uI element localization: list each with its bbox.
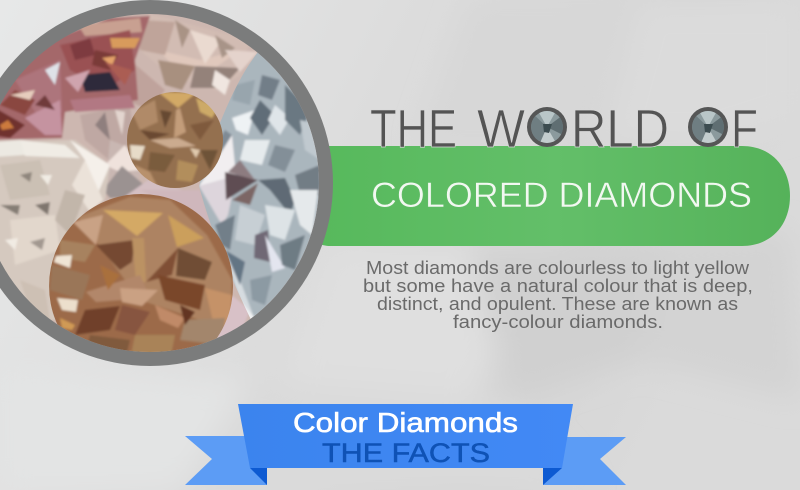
ribbon right fold [543, 468, 562, 485]
intro paragraph: Most diamonds are colourless to light yellow [366, 258, 750, 278]
facets: deep pink diamond [0, 16, 150, 140]
big brown diamond [49, 194, 233, 352]
facets: pale white diamond [0, 140, 110, 320]
title: THE WORLD OF: W [477, 99, 525, 159]
diamond photo [0, 14, 319, 352]
title: THE WORLD OF: THE [370, 99, 457, 159]
photo circle: colored diamonds [0, 0, 340, 382]
ribbon left fold [250, 468, 267, 485]
title: THE WORLD OF [370, 99, 758, 159]
intro paragraph: but some have a natural colour that is deep, [363, 276, 753, 296]
icon: diamond letter O in OF [688, 107, 728, 147]
ribbon subheading: THE FACTS: THE FACTS [322, 438, 490, 468]
subtitle: COLORED DIAMONDS: COLORED DIAMONDS [371, 176, 752, 215]
ribbon heading: Color Diamonds: Color Diamonds [293, 407, 518, 438]
intro paragraph [363, 258, 753, 332]
marquise diamond [199, 52, 319, 319]
intro paragraph: distinct, and opulent. These are known as [377, 294, 738, 314]
facets: pale pink diamond [80, 20, 257, 199]
intro paragraph: fancy-colour diamonds. [453, 312, 663, 332]
ribbon right tail [543, 437, 626, 485]
title: THE WORLD OF: RLD [571, 99, 669, 159]
icon: diamond letter O in WORLD [527, 107, 567, 147]
grey ring [0, 0, 333, 366]
ribbon main band [238, 404, 573, 468]
green title bar [320, 146, 790, 246]
title: THE WORLD OF: F [731, 99, 758, 159]
small brown diamond [127, 92, 223, 188]
ribbon left tail [185, 436, 267, 485]
ribbon banner [185, 404, 626, 485]
facets: pink band between stones [192, 190, 210, 224]
